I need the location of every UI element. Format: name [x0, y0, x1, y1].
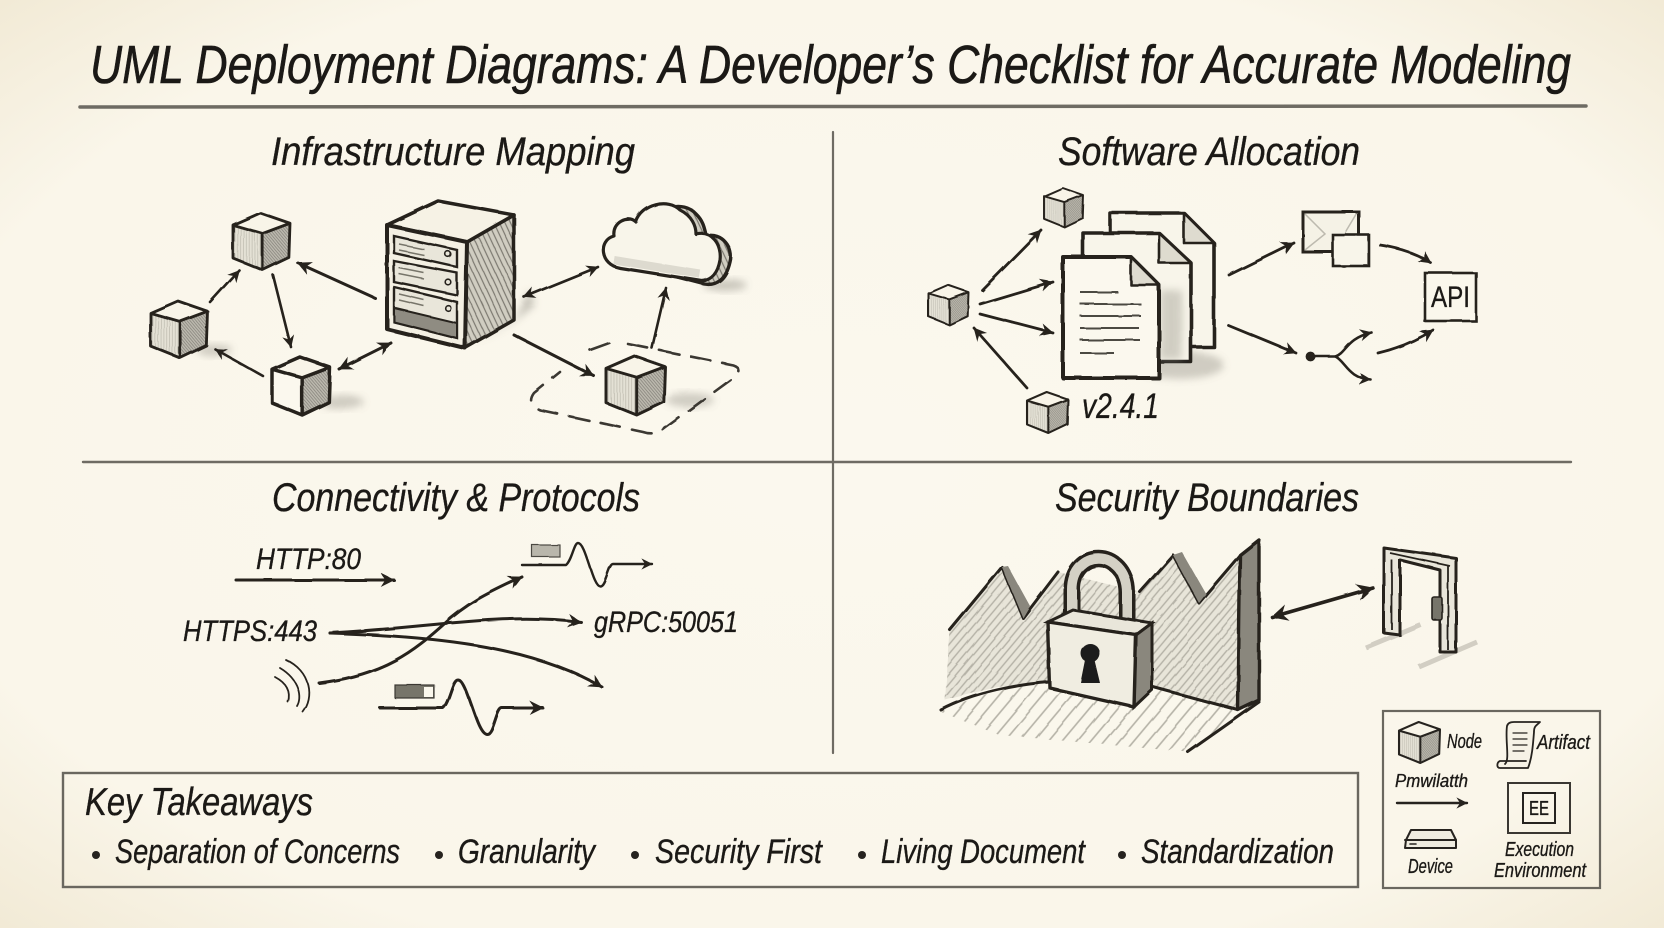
icon: signal pulse top — [522, 543, 652, 586]
diagram: artifacts and nodes — [928, 188, 1476, 433]
heading: infrastructure mapping: Infrastructure Mapping — [271, 130, 635, 174]
label: execution environment: Execution — [1505, 839, 1574, 861]
icon: stacked documents — [1063, 213, 1214, 378]
panel: infrastructure mapping — [150, 130, 747, 433]
icon: legend artifact scroll — [1497, 722, 1540, 768]
icon: wireless waves — [275, 660, 309, 712]
icon: execution environment: EE — [1529, 798, 1549, 820]
bullet: living document: Living Document — [881, 833, 1086, 871]
icon: padlock — [1048, 559, 1152, 707]
bullet: granularity: Granularity — [458, 833, 597, 871]
icon: API box — [1425, 273, 1476, 321]
legend — [1383, 711, 1600, 888]
bullet: security first: Security First — [655, 833, 823, 871]
icon: node cube left — [928, 285, 968, 325]
label: API: API — [1431, 281, 1470, 314]
icon: legend node — [1399, 722, 1440, 763]
icon: firewall wall — [941, 540, 1259, 752]
icon: execution environment box — [1303, 212, 1369, 266]
icon: node cube bottom — [1027, 392, 1068, 433]
bullet: separation of concerns: Separation of Concerns — [115, 833, 400, 871]
box: legend frame — [1383, 711, 1600, 888]
label: execution environment: Environment — [1494, 860, 1587, 882]
heading: software allocation: Software Allocation — [1058, 130, 1360, 174]
icon: interface fork — [1306, 332, 1371, 380]
arrow: legend path — [1397, 802, 1467, 804]
icon: device — [1405, 830, 1456, 848]
arrow: wall to gateway — [1272, 588, 1373, 617]
label: gRPC:50051: gRPC:50051 — [594, 606, 738, 639]
arrow: wireless upward — [319, 577, 522, 683]
icon: node cube 1 — [233, 213, 290, 270]
icon: dashed boundary — [531, 342, 738, 433]
label: node: Node — [1447, 731, 1482, 753]
arrow: HTTPS downward — [330, 633, 602, 687]
label: HTTPS:443: HTTPS:443 — [183, 615, 317, 648]
diagram: protocol arrows — [236, 543, 652, 734]
icon: node cube 3 — [272, 357, 330, 415]
icon: execution environment — [1508, 783, 1570, 833]
panel: security boundaries — [941, 476, 1477, 752]
label: device: Device — [1408, 856, 1453, 878]
arrows: allocation flows — [974, 230, 1433, 388]
bullet: standardization: Standardization — [1141, 833, 1334, 871]
icon: cloud — [603, 204, 731, 284]
diagram: firewall and padlock — [941, 540, 1477, 752]
arrow: HTTPS to gRPC — [330, 619, 581, 633]
label: path: Pmwilatth — [1395, 771, 1468, 791]
icon: node cube 2 — [150, 301, 208, 358]
heading: connectivity and protocols: Connectivity & Protocols — [272, 476, 640, 520]
heading: key takeaways: Key Takeaways — [85, 781, 313, 824]
icon: node cube top — [1044, 188, 1083, 227]
label: HTTP:80: HTTP:80 — [256, 543, 361, 576]
panel: software allocation — [928, 130, 1476, 433]
panel: connectivity and protocols — [183, 476, 738, 734]
arrows: connections — [210, 263, 666, 376]
icon: hatched floor — [941, 682, 1259, 752]
diagram: nodes, server and cloud — [150, 201, 747, 433]
panel: key takeaways — [63, 773, 1358, 887]
icon: node cube in boundary — [606, 356, 665, 415]
label: artifact: Artifact — [1536, 732, 1591, 754]
heading: security boundaries: Security Boundaries — [1055, 476, 1359, 520]
icon: signal pulse bottom — [380, 680, 543, 734]
box: takeaways frame — [63, 773, 1358, 887]
icon: server rack — [387, 201, 514, 348]
arrow: HTTP — [236, 578, 394, 582]
icon: gateway door — [1366, 548, 1477, 667]
label: version: v2.4.1 — [1082, 387, 1159, 426]
label: execution environment — [1494, 839, 1587, 882]
